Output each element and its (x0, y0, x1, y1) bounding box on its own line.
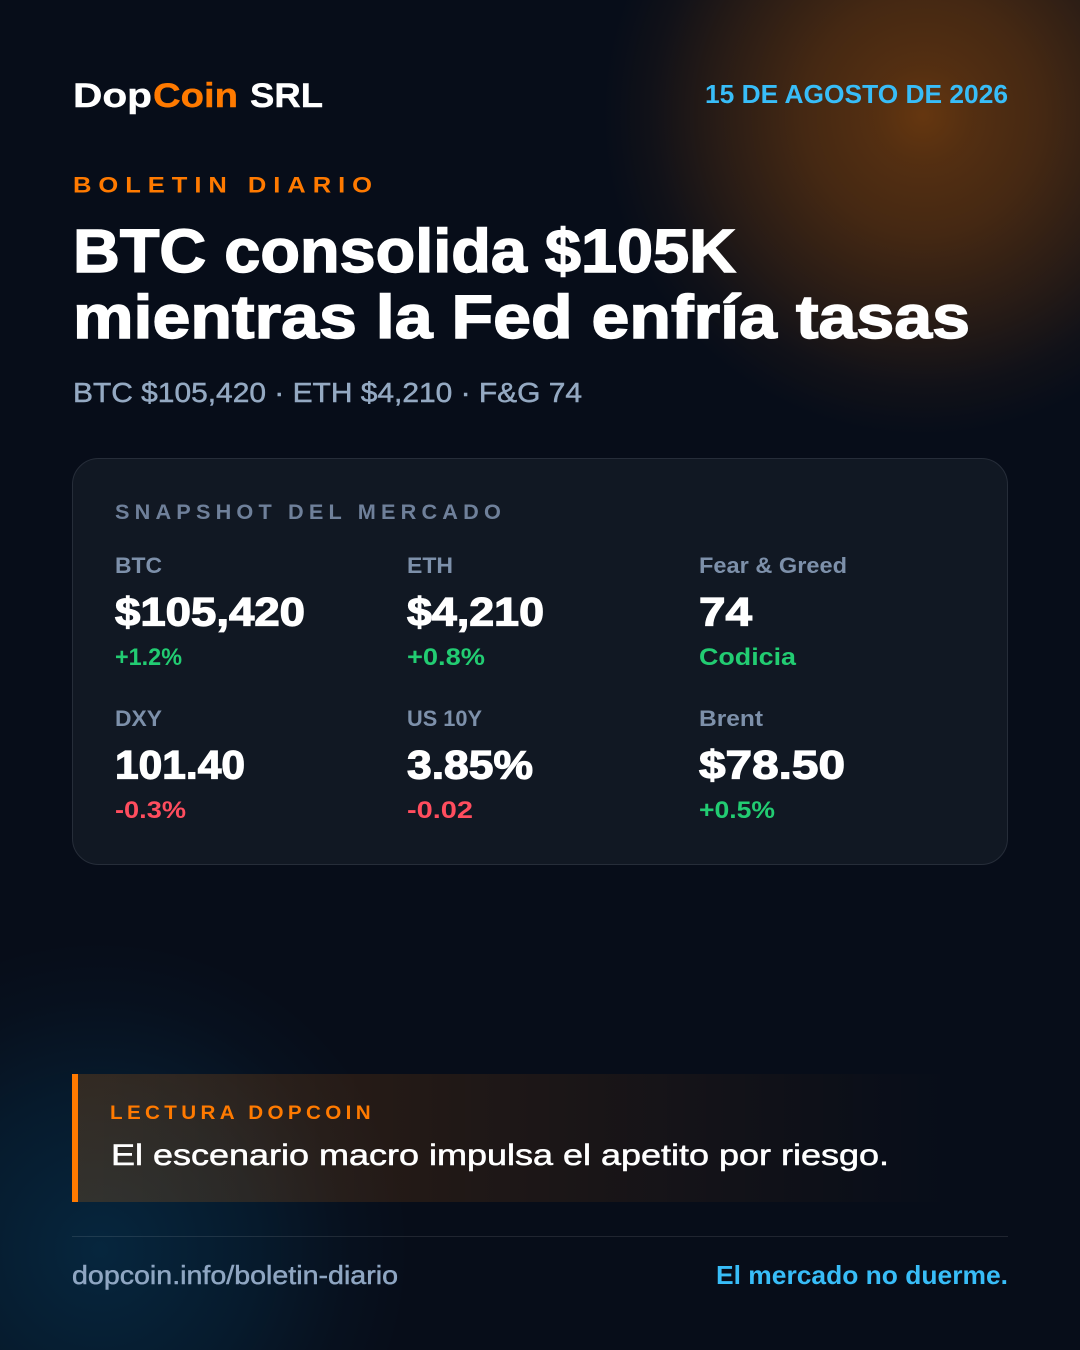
metric: Brent: +0.5% (699, 797, 775, 824)
metric: DXY (115, 706, 245, 824)
date: 15 DE AGOSTO DE 2026 (705, 79, 1008, 109)
callout label: LECTURA DOPCOIN (110, 1103, 375, 1124)
metric: Fear and Greed: Codicia (699, 644, 797, 671)
metric: ETH: ETH (407, 553, 453, 578)
callout background (78, 1074, 1008, 1202)
header logo: Coin (153, 77, 238, 115)
metric: ETH: +0.8% (407, 644, 485, 671)
main title: BTC consolida $105K (73, 217, 736, 285)
metric: Brent: $78.50 (699, 744, 845, 788)
metric: DXY: -0.3% (115, 797, 186, 824)
metric: ETH (407, 553, 544, 671)
footer url: dopcoin.info/boletin-diario (72, 1260, 398, 1290)
metric: Fear and Greed: 74 (699, 590, 753, 634)
metric: DXY: DXY (115, 706, 162, 731)
panel: market snapshot (72, 458, 1008, 864)
metric: US 10Y (407, 706, 533, 824)
metric: US 10Y: -0.02 (407, 797, 473, 824)
orange glow (600, 0, 1080, 440)
metric: DXY: 101.40 (115, 744, 245, 788)
footer divider (72, 1236, 1008, 1237)
metric: Brent (699, 706, 845, 824)
metric: BTC: $105,420 (115, 590, 305, 634)
callout accent bar (72, 1074, 78, 1202)
subtitle: BTC $105,420 · ETH $4,210 · F&G 74 (73, 377, 582, 408)
callout: lectura dopcoin (72, 1074, 1008, 1202)
metric: US 10Y: US 10Y (407, 706, 482, 731)
metric: US 10Y: 3.85% (407, 744, 533, 788)
callout text: El escenario macro impulsa el apetito por riesgo. (111, 1139, 889, 1172)
eyebrow: BOLETIN DIARIO (73, 172, 379, 198)
metric: Brent: Brent (699, 706, 764, 731)
footer tagline: El mercado no duerme. (716, 1260, 1008, 1290)
panel heading: SNAPSHOT DEL MERCADO (115, 501, 506, 524)
header logo (73, 77, 323, 115)
main title (73, 217, 970, 351)
metric: BTC (115, 553, 305, 671)
metric: ETH: $4,210 (407, 590, 544, 634)
header logo: Dop (73, 77, 152, 115)
metric: Fear and Greed: Fear & Greed (699, 553, 847, 578)
header logo: SRL (250, 77, 323, 115)
blue glow (0, 935, 415, 1350)
panel background (72, 458, 1008, 864)
metric: BTC: BTC (115, 553, 162, 578)
metric: Fear and Greed (699, 553, 847, 671)
metric: BTC: +1.2% (115, 644, 182, 671)
main title: mientras la Fed enfría tasas (73, 283, 970, 351)
